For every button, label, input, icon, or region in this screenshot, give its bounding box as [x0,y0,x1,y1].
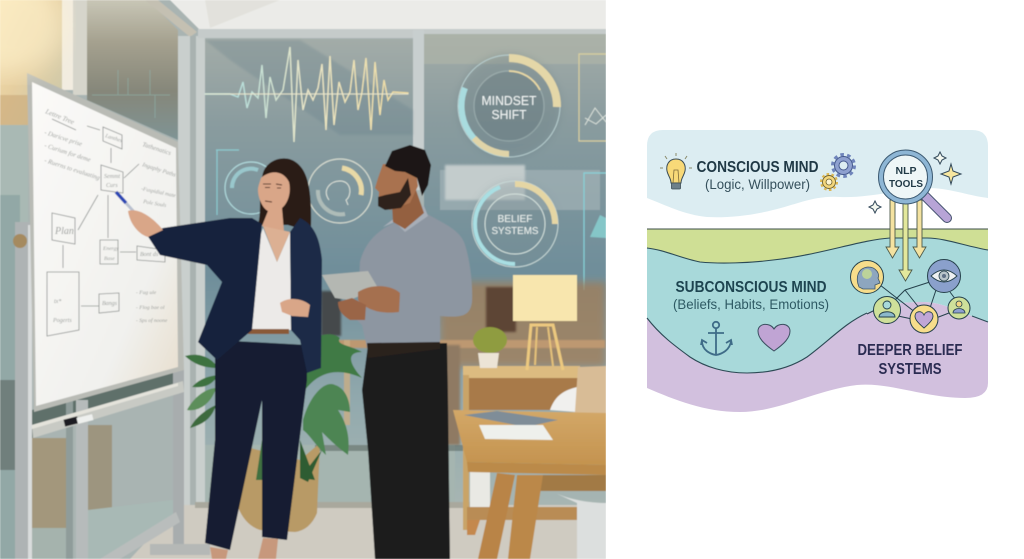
hair [258,158,311,232]
icon: light bulb [660,153,692,189]
whiteboard handwritten notes: - Fug ule [136,290,157,296]
layer boundary lines [647,229,988,373]
heading: subconscious mind: SUBCONSCIOUS MIND [676,279,826,296]
whiteboard handwritten notes: - Curium for deme [43,142,91,164]
icon: sparkles [869,152,961,213]
white background right [606,0,1024,559]
small brain hologram [216,150,372,223]
whiteboard [27,73,184,412]
whiteboard handwritten notes: Pogerts [52,318,72,324]
whiteboard handwritten notes: Lanthes [103,133,123,144]
heading: deeper belief systems: DEEPER BELIEF [858,342,963,359]
whiteboard handwritten notes: - Flog bae ol [136,305,165,311]
belt [367,342,440,358]
whiteboard handwritten notes: Ingaphy Paths [140,162,177,179]
icon: magnifying glass NLP tools: TOOLS [889,178,923,190]
woman [128,158,322,559]
whiteboard handwritten notes [43,107,177,324]
whiteboard handwritten notes: Lettre Tree [43,107,75,126]
whiteboard handwritten notes: Base [104,256,115,262]
whiteboard handwritten notes: - Ruerns to evaluating [43,157,101,182]
mindset shift hologram [457,54,561,158]
holographic waveform [205,47,408,142]
layer: conscious mind background [647,130,988,217]
beard [378,178,411,210]
whiteboard handwritten notes: tx* [54,299,61,305]
heading: conscious mind [696,159,818,192]
icon: person node [874,296,900,324]
blouse [249,228,291,330]
glass wall panes [178,29,606,516]
sunlight glare [0,0,65,75]
whiteboard diagram [47,119,165,336]
tablet [322,271,378,300]
neck [392,190,424,229]
trousers [205,340,307,550]
layer: subconscious mind [647,238,988,373]
woven basket [238,443,320,532]
icon: head node [850,260,884,294]
trousers [362,343,450,559]
belt [248,329,289,334]
network connections [867,280,956,319]
belief systems hologram: BELIEF [498,213,532,225]
icon: heart [758,324,790,351]
hands [358,286,400,313]
icon: magnifying glass NLP tools: NLP [896,165,916,177]
marker pen [116,192,135,213]
whiteboard handwritten notes: Plan [54,226,74,237]
blazer [147,218,262,360]
hair [385,145,431,196]
icon: eye node [928,260,960,292]
whiteboard handwritten notes: Tathenatics [141,141,172,157]
icon: large gear [832,154,854,176]
floor [130,445,606,559]
whiteboard handwritten notes: Curs [106,183,118,189]
whiteboard handwritten notes: - Daricve prise [43,129,83,148]
office reflection [321,282,606,445]
wooden cabinet [463,366,580,535]
man [322,145,472,559]
layer: green band [647,229,988,263]
mind layers diagram [647,130,988,412]
facial features [263,184,282,202]
whiteboard handwritten notes: Pole Souls [142,199,167,209]
face and neck [258,172,290,232]
whiteboard handwritten notes: Semmt [104,174,120,180]
shirt [357,212,472,352]
heading: deeper belief systems: SYSTEMS [878,361,942,378]
heading: subconscious mind: (Beliefs, Habits, Emotions) [673,296,829,312]
whiteboard handwritten notes: Bont ds [140,252,159,258]
icon: heart node [910,305,938,333]
mindset shift hologram: SHIFT [492,108,527,122]
whiteboard handwritten notes: Bangs [102,301,118,307]
chair and laptop [550,366,606,559]
ceiling and walls [0,0,606,559]
table lamp [513,275,577,370]
heading: deeper belief systems [858,342,963,378]
heading: conscious mind: CONSCIOUS MIND [696,159,818,176]
heading: subconscious mind [673,279,829,312]
mindset shift hologram: MINDSET [482,94,537,108]
left glass panes [0,0,197,559]
whiteboard handwritten notes: - Sps of noone [136,317,168,324]
small potted plant [473,327,507,368]
face [375,164,418,210]
icon: anchor [701,322,732,355]
belief systems hologram: SYSTEMS [492,225,538,237]
office photo [0,0,606,559]
hands [128,210,163,237]
whiteboard handwritten notes: Energy [102,246,119,252]
glass reflections behind whiteboard [32,372,173,559]
icon: magnifying glass NLP tools [878,150,947,218]
whiteboard handwritten notes: -Fuspidial mate [141,186,177,199]
icon: small gear [821,174,837,190]
heading: conscious mind: (Logic, Willpower) [705,176,810,192]
desk [453,410,606,559]
layer: deeper belief systems [647,302,988,412]
belief systems hologram [472,181,558,267]
arrows from NLP tools [886,200,926,281]
whiteboard stand [13,222,210,559]
potted plant [185,334,362,532]
icon: small person node [948,297,970,319]
hologram chart panels [579,54,606,290]
tablet and papers on desk [464,411,558,427]
